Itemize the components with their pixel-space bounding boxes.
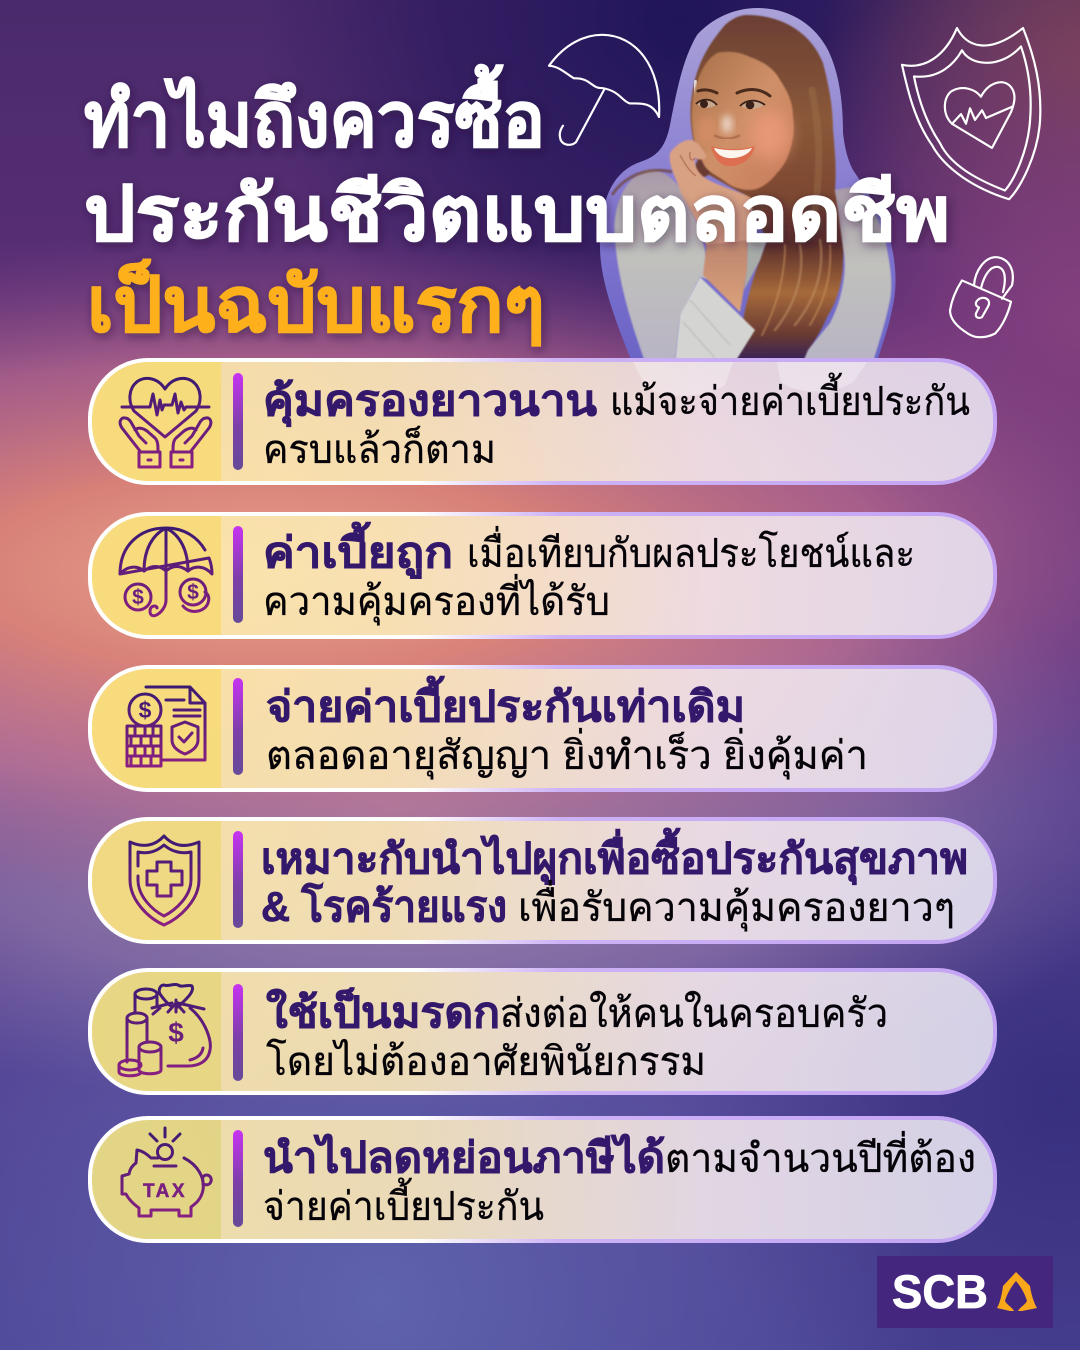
card text: คุ้มครองยาวนาน	[263, 377, 597, 427]
card 6: tax deduction	[90, 1118, 995, 1241]
icon text: dollar signs	[132, 581, 199, 609]
card 4: rider suitability	[90, 819, 995, 942]
card text: จ่ายค่าเบี้ยประกันเท่าเดิม	[266, 675, 745, 730]
forearm	[703, 232, 748, 312]
icon: shield with cross	[130, 836, 199, 925]
card 1: long coverage: แม้จะจ่ายค่าเบี้ยประกัน	[610, 372, 970, 424]
shirt right	[803, 186, 891, 362]
card 5: inheritance: โดยไม่ต้องอาศัยพินัยกรรม	[266, 1039, 706, 1084]
finger lines	[680, 152, 696, 176]
logo: SCB: SCB	[892, 1265, 988, 1318]
icon: outline shield with heart	[902, 28, 1040, 199]
icon: outline padlock	[950, 257, 1013, 337]
hair	[690, 15, 844, 362]
logo: SCB	[877, 1256, 1053, 1328]
photo: smiling woman on lavender blob	[600, 8, 896, 362]
card 5: inheritance	[90, 970, 995, 1093]
icon: money bag and coins	[119, 984, 210, 1076]
card 2: low premium: เมื่อเทียบกับผลประโยชน์และ	[467, 526, 915, 576]
card 1: long coverage	[90, 360, 995, 483]
faint photo fade through card	[633, 362, 867, 396]
icon: heart held by hands	[120, 378, 211, 467]
card 2: low premium: ความคุ้มครองที่ได้รับ	[263, 574, 610, 626]
card 4: rider suitability: เพื่อรับความคุ้มครองยาวๆ	[518, 880, 955, 932]
icon text: dollar sign: $	[168, 1017, 184, 1048]
card 1: long coverage: ครบแล้วก็ตาม	[263, 425, 496, 472]
icon: SCB bai sema	[997, 1272, 1037, 1311]
shirt left	[614, 170, 712, 362]
title	[84, 64, 950, 348]
smile	[711, 146, 755, 166]
icon text: dollar sign: $	[139, 697, 152, 723]
icon: document, coins and shield	[127, 687, 205, 766]
card text: ค่าเบี้ยถูก	[263, 521, 453, 579]
card 5: inheritance: ส่งต่อให้คนในครอบครัว	[500, 990, 888, 1036]
icon text: dollar signs: $	[187, 581, 199, 604]
cheek blush	[750, 110, 790, 160]
hair strands	[762, 90, 830, 335]
icon: piggy bank with TAX	[122, 1128, 211, 1216]
hand	[670, 140, 752, 245]
card text: ใช้เป็นมรดก	[266, 987, 500, 1036]
icon text: TAX: TAX	[143, 1181, 187, 1202]
collar	[744, 242, 767, 290]
hair highlight strand	[694, 80, 697, 96]
icon: umbrella with coins	[120, 528, 212, 616]
sleeve folds	[683, 300, 730, 358]
card 6: tax deduction: จ่ายค่าเบี้ยประกัน	[263, 1177, 544, 1229]
nose	[722, 115, 732, 133]
dark gap under cheek	[695, 159, 711, 177]
card 6: tax deduction: ตามจำนวนปีที่ต้อง	[665, 1131, 976, 1181]
icon: outline umbrella	[549, 35, 659, 145]
card 2: low premium	[90, 514, 995, 637]
title: เป็นฉบับแรกๆ	[87, 259, 545, 348]
card text: นำไปลดหย่อนภาษีได้	[263, 1133, 665, 1181]
card 4: rider suitability: & โรคร้ายแรง	[261, 882, 507, 930]
lavender blob	[600, 8, 896, 362]
sleeve	[675, 277, 755, 362]
card text: เหมาะกับนำไปผูกเพื่อซื้อประกันสุขภาพ	[261, 827, 968, 885]
card 3: fixed premium	[90, 667, 995, 790]
eyes	[696, 100, 765, 109]
brows	[698, 90, 770, 96]
card 3: fixed premium: ตลอดอายุสัญญา ยิ่งทำเร็ว ยิ่งคุ้มค่า	[266, 728, 868, 780]
title: ประกันชีวิตแบบตลอดชีพ	[84, 172, 950, 257]
face	[692, 52, 794, 190]
title: ทำไมถึงควรซื้อ	[84, 64, 545, 163]
icon text: dollar signs: $	[132, 586, 144, 609]
shirt strand at shoulder	[612, 170, 672, 195]
